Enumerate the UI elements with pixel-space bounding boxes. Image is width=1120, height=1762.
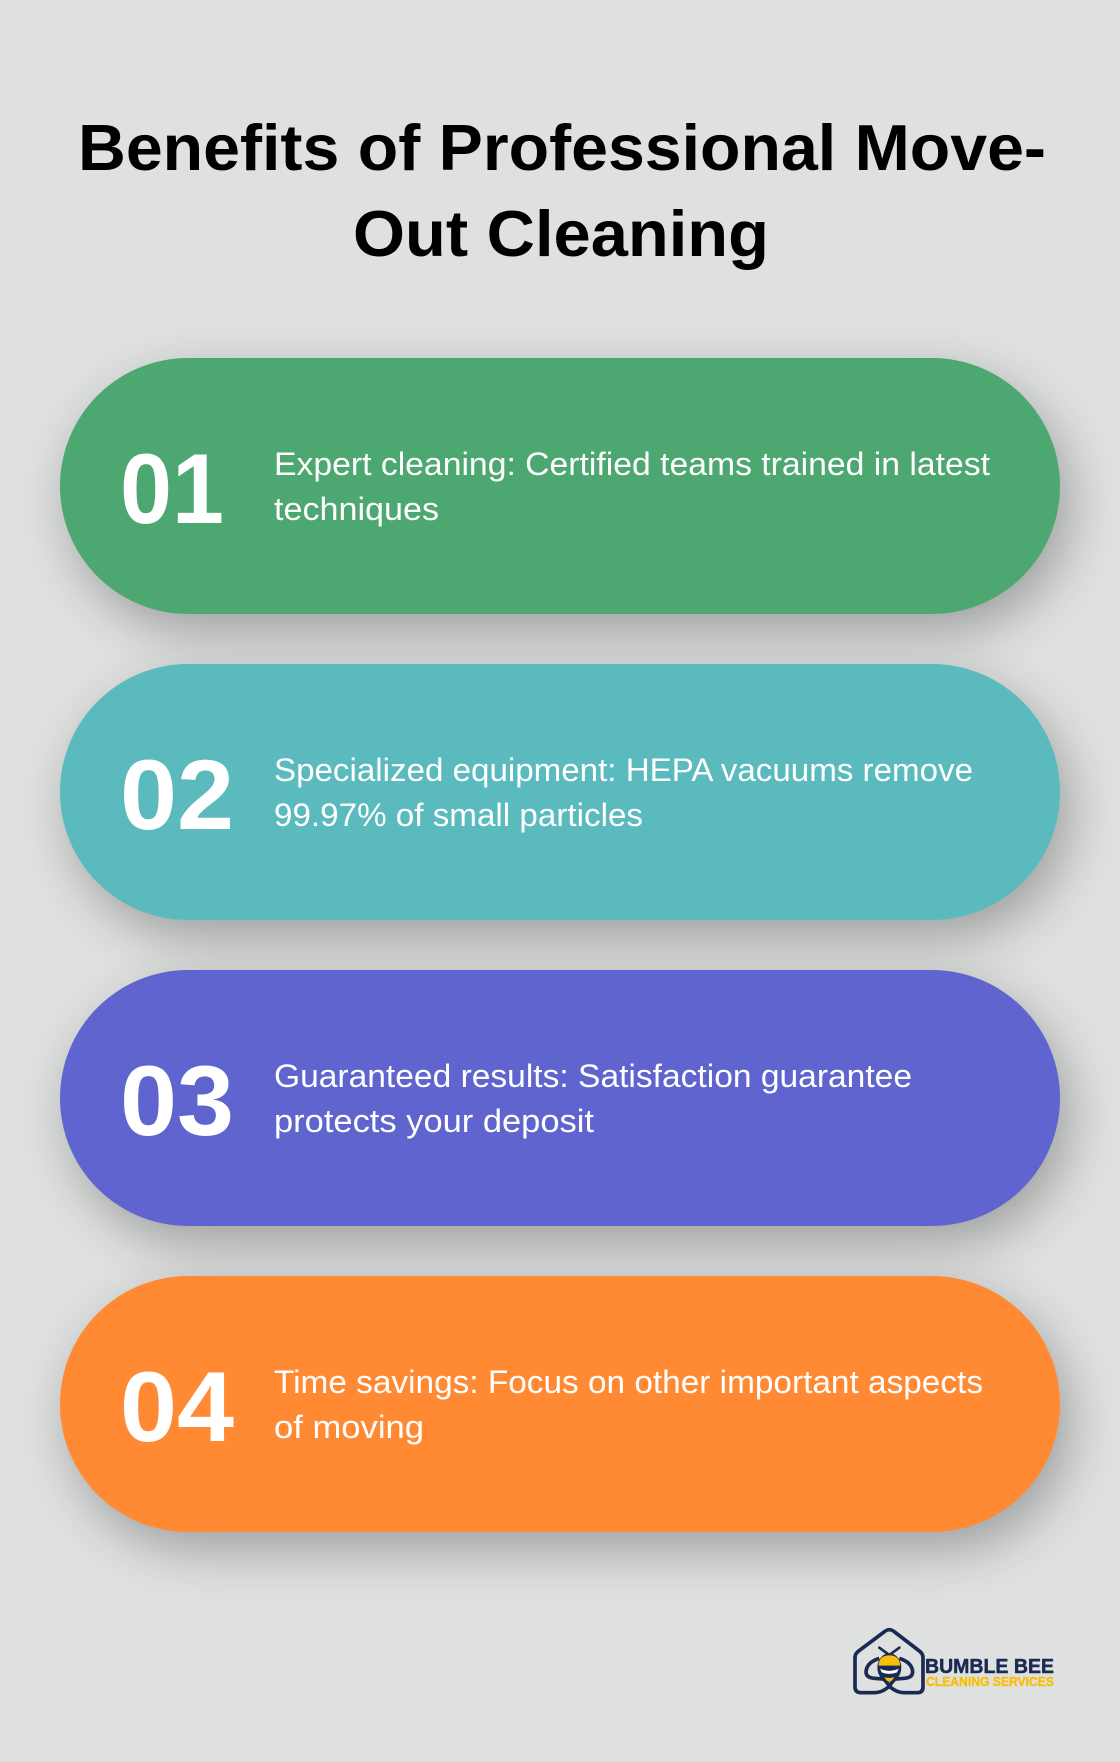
text: expert cleaning: techniques [274, 491, 439, 527]
text: time savings [274, 1364, 983, 1445]
text: expert cleaning: Expert cleaning: Certified teams trained in latest [274, 446, 990, 482]
panel: benefit 03 guaranteed results [60, 970, 1060, 1226]
title: Benefits of Professional Move- [78, 111, 1046, 184]
number 02: 02 [120, 739, 234, 850]
logo: Bumble Bee Cleaning Services [853, 1628, 1054, 1694]
text: specialized equipment [274, 752, 973, 833]
text: specialized equipment: Specialized equipment: HEPA vacuums remove [274, 752, 973, 788]
text: time savings: of moving [274, 1409, 424, 1445]
text: guaranteed results: Guaranteed results: Satisfaction guarantee [274, 1058, 912, 1094]
logo text: Cleaning Services: CLEANING SERVICES [926, 1675, 1054, 1689]
number 01: 01 [120, 433, 224, 544]
panel: benefit 02 specialized equipment [60, 664, 1060, 920]
text: guaranteed results: protects your deposit [274, 1103, 594, 1139]
panel: benefit 04 time savings [60, 1276, 1060, 1532]
text: expert cleaning [274, 446, 990, 527]
number 04: 04 [120, 1351, 234, 1462]
text: specialized equipment: 99.97% of small particles [274, 797, 643, 833]
logo text: Bumble Bee: BUMBLE BEE [925, 1655, 1054, 1678]
number 03: 03 [120, 1045, 234, 1156]
text: guaranteed results [274, 1058, 912, 1139]
text: time savings: Time savings: Focus on other important aspects [274, 1364, 983, 1400]
title: Out Cleaning [353, 197, 769, 270]
panel: benefit 01 expert cleaning [60, 358, 1060, 614]
icon: house and bee [855, 1630, 923, 1693]
title [78, 111, 1046, 270]
